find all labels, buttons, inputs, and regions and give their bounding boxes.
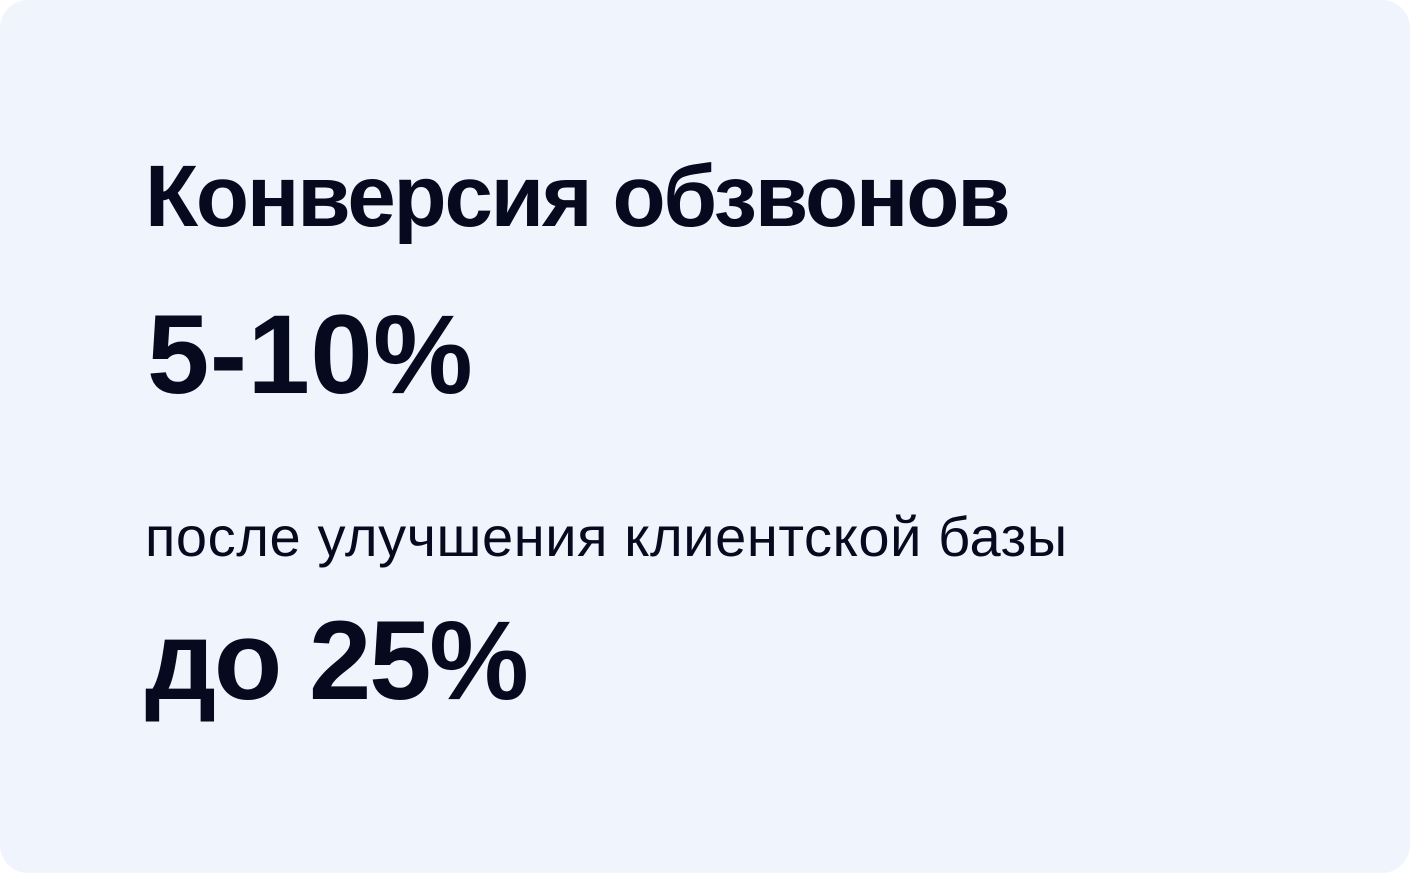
heading: call conversion: Конверсия обзвонов (145, 148, 1008, 245)
stat: up to 25%: до 25% (145, 598, 527, 723)
stat: 5-10%: 5-10% (147, 292, 473, 417)
text: after improving client base: после улучшения клиентской базы (145, 505, 1068, 568)
